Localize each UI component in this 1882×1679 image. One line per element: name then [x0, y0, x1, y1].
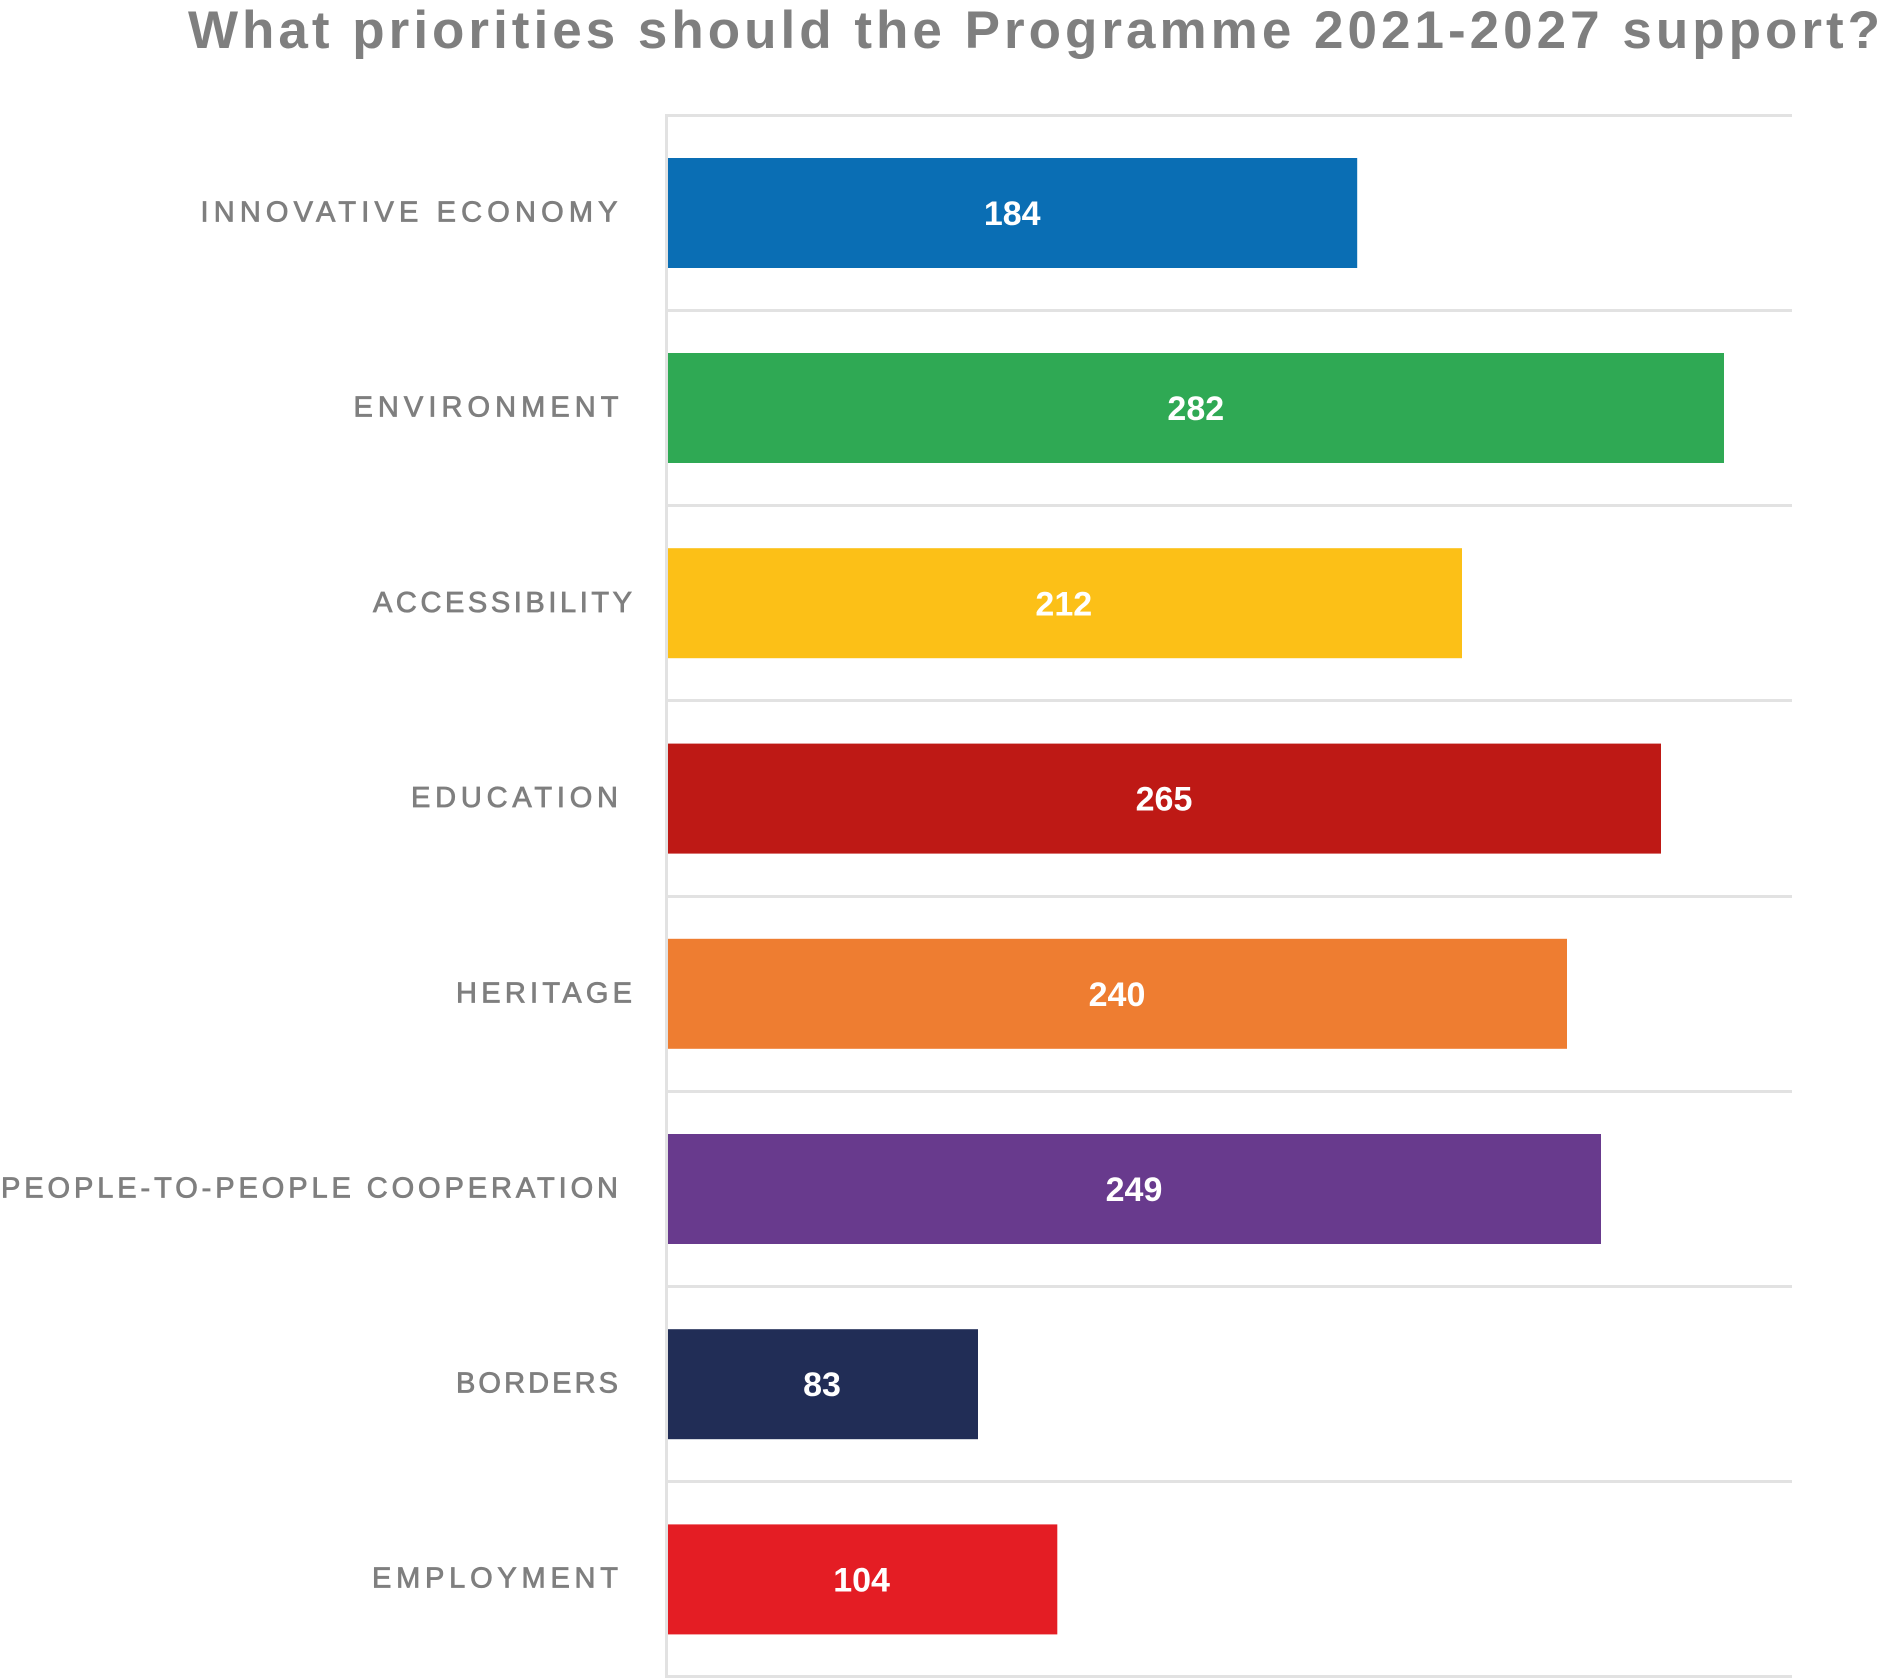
label: Heritage: HERITAGE: [456, 977, 632, 1009]
row: Heritage: [456, 939, 1567, 1049]
bar: Education 265: [668, 744, 1661, 854]
label: Accessibility: ACCESSIBILITY: [373, 587, 632, 619]
row: Accessibility: [373, 548, 1462, 658]
row: Education: [411, 744, 1661, 854]
value: 240: 240: [1089, 976, 1145, 1014]
bar: Innovative Economy 184: [668, 158, 1357, 268]
value: 265: 265: [1136, 781, 1192, 819]
value: 249: 249: [1106, 1171, 1162, 1209]
label: Employment: EMPLOYMENT: [372, 1562, 618, 1594]
title: What priorities should the Programme 2021-2027 support?: [188, 1, 1880, 60]
value: 184: 184: [984, 195, 1041, 233]
bar: Heritage 240: [668, 939, 1567, 1049]
label: Environment: ENVIRONMENT: [354, 392, 619, 424]
bar: Borders 83: [668, 1329, 978, 1439]
value: 104: 104: [833, 1561, 890, 1599]
row: Environment: [354, 353, 1724, 463]
value: 212: 212: [1035, 585, 1092, 623]
bar: Employment 104: [668, 1524, 1057, 1634]
label: Education: EDUCATION: [411, 782, 618, 814]
row: Borders: [456, 1329, 978, 1439]
bar: Environment 282: [668, 353, 1724, 463]
row: People-to-people cooperation: [1, 1134, 1601, 1244]
bar: Accessibility 212: [668, 548, 1462, 658]
label: People-to-people cooperation: PEOPLE-TO-PEOPLE COOPERATION: [1, 1172, 618, 1204]
bar: People-to-people cooperation 249: [668, 1134, 1601, 1244]
value: 83: 83: [803, 1366, 841, 1404]
value: 282: 282: [1167, 390, 1224, 428]
row: Employment: [372, 1524, 1057, 1634]
row: Innovative Economy: [200, 158, 1357, 268]
label: Innovative Economy: INNOVATIVE ECONOMY: [200, 196, 618, 228]
label: Borders: BORDERS: [456, 1367, 618, 1399]
